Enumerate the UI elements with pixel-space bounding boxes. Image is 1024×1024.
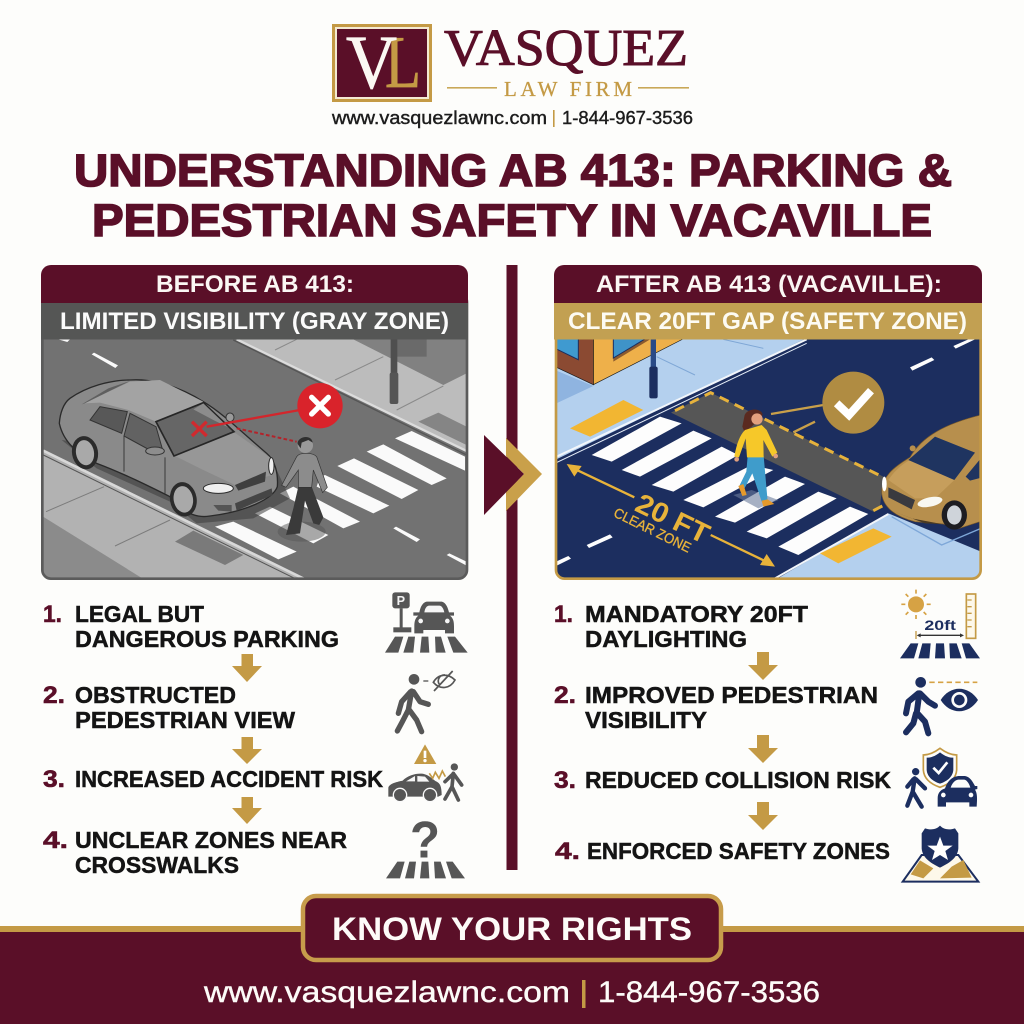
footer contact line: 1-844-967-3536 xyxy=(598,976,820,1009)
panel header: before: BEFORE AB 413: xyxy=(156,271,354,298)
panel subheader: clear gap xyxy=(554,303,982,340)
step 2 after: VISIBILITY xyxy=(585,707,707,733)
header logo xyxy=(331,20,693,128)
list: before steps xyxy=(43,601,383,878)
title xyxy=(74,145,952,246)
icon: question mark and crosswalk: ? xyxy=(410,811,440,869)
title: PEDESTRIAN SAFETY IN VACAVILLE xyxy=(92,195,932,246)
step 2 before: PEDESTRIAN VIEW xyxy=(75,707,296,733)
step 4 before: 4. xyxy=(43,827,68,854)
header contact line: 1-844-967-3536 xyxy=(562,108,693,128)
footer contact line xyxy=(203,976,820,1009)
step 2 after: IMPROVED PEDESTRIAN xyxy=(585,682,878,708)
step 1 after: MANDATORY 20FT xyxy=(585,601,809,627)
step 4 before: UNCLEAR ZONES NEAR xyxy=(75,827,347,853)
logo mark: VL monogram xyxy=(332,21,432,105)
header contact line xyxy=(331,108,693,128)
icon: pedestrian with clear line of sight to eye xyxy=(906,677,978,733)
step 1 after: DAYLIGHTING xyxy=(585,626,747,652)
footer band xyxy=(0,896,1024,1024)
center divider with arrow xyxy=(484,265,542,870)
arrow down xyxy=(748,802,778,830)
panel subheader: limited visibility xyxy=(41,303,468,340)
logo mark: VL monogram: L xyxy=(385,22,421,104)
20 ft measurement arrows and label xyxy=(567,464,775,567)
gray pedestrian xyxy=(278,437,327,542)
illustration: gray street scene xyxy=(40,293,470,587)
firm subtitle with rules: LAW FIRM xyxy=(504,77,632,101)
icon: question mark and crosswalk xyxy=(386,811,465,878)
call-to-action button: KNOW YOUR RIGHTS xyxy=(332,911,692,947)
icons: after steps xyxy=(900,590,980,882)
header contact line: www.vasquezlawnc.com xyxy=(331,108,547,128)
step 3 after: REDUCED COLLISION RISK xyxy=(585,767,891,793)
icon: warning triangle, car collision and pedestrian xyxy=(388,744,462,802)
panel header: before xyxy=(41,265,468,303)
arrow down xyxy=(232,797,262,824)
gold check marker xyxy=(771,372,884,434)
gold parked car xyxy=(882,414,985,530)
gray clear zone with dashed edge xyxy=(671,393,883,512)
step 2 before: 2. xyxy=(43,682,65,709)
arrow down xyxy=(232,654,262,682)
logo mark: VL monogram: V xyxy=(346,21,397,105)
arrow down xyxy=(748,735,778,763)
call-to-action button xyxy=(303,896,721,960)
icon: police badge on map xyxy=(903,826,978,882)
icon: parking sign, car and crosswalk: P xyxy=(397,594,406,608)
illustration: colored street scene xyxy=(554,340,982,580)
list: after steps xyxy=(554,601,891,865)
step 4 before xyxy=(43,827,347,878)
step 1 before: DANGEROUS PARKING xyxy=(75,626,339,652)
step 4 before: CROSSWALKS xyxy=(75,852,239,878)
panel subheader: limited visibility: LIMITED VISIBILITY (GRAY ZONE) xyxy=(60,308,449,335)
title: UNDERSTANDING AB 413: PARKING & xyxy=(74,145,952,196)
panel: before AB 413 xyxy=(40,265,470,587)
icon: pedestrian with crossed-out eye xyxy=(397,671,455,732)
icons: before steps xyxy=(385,592,468,878)
arrow down xyxy=(232,737,262,764)
step 3 after: 3. xyxy=(554,767,576,794)
20 ft measurement arrows and label: CLEAR ZONE xyxy=(611,504,694,556)
step 3 before: INCREASED ACCIDENT RISK xyxy=(75,766,383,792)
footer contact line: www.vasquezlawnc.com xyxy=(203,976,570,1009)
arrow down xyxy=(748,652,778,680)
panel header: after xyxy=(554,265,982,303)
step 1 after: 1. xyxy=(554,601,573,628)
panel subheader: clear gap: CLEAR 20FT GAP (SAFETY ZONE) xyxy=(568,308,967,335)
pedestrian in yellow sweater xyxy=(733,410,778,508)
step 1 after xyxy=(554,601,809,652)
step 2 before xyxy=(43,682,296,733)
step 4 after: 4. xyxy=(555,838,580,865)
step 3 before: 3. xyxy=(43,766,65,793)
icon: sun, 20ft ruler and crosswalk: 20ft xyxy=(924,617,956,633)
step 1 before xyxy=(43,601,339,652)
blocked sight line and red X marker xyxy=(192,383,343,442)
step 1 before: LEGAL BUT xyxy=(75,601,205,627)
icon: shield, pedestrian and car xyxy=(907,748,977,807)
step 2 after: 2. xyxy=(554,682,576,709)
panel: after AB 413 xyxy=(554,265,985,587)
icon: sun, 20ft ruler and crosswalk xyxy=(900,590,980,658)
panel header: after: AFTER AB 413 (VACAVILLE): xyxy=(596,271,942,298)
step 1 before: 1. xyxy=(43,601,62,628)
icon: parking sign, car and crosswalk xyxy=(385,592,468,653)
firm name: VASQUEZ xyxy=(444,20,688,77)
step 2 after xyxy=(554,682,878,733)
step 4 after: ENFORCED SAFETY ZONES xyxy=(587,838,890,864)
step 2 before: OBSTRUCTED xyxy=(75,682,236,708)
gray car xyxy=(59,380,290,523)
20 ft measurement arrows and label: 20 FT xyxy=(631,488,715,550)
